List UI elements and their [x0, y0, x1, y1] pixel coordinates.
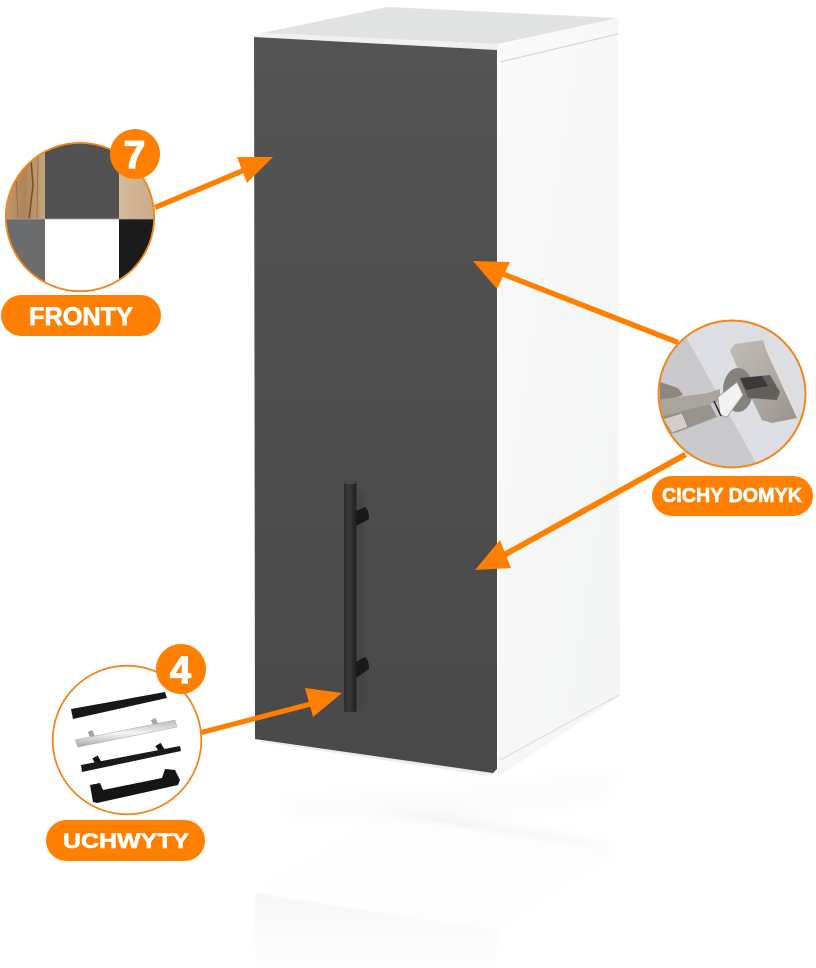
hinge photo circle — [650, 320, 806, 470]
uchwyty callout — [46, 644, 206, 861]
cabinet door — [254, 37, 497, 773]
cabinet top — [262, 7, 618, 44]
handle: silver bar — [75, 719, 177, 747]
door handle — [344, 481, 369, 712]
label: cichy domyk — [652, 476, 813, 516]
label: uchwyty — [46, 820, 205, 861]
badge: 4 — [156, 644, 206, 694]
floor shadow and reflection — [255, 770, 620, 968]
arrow: handles — [201, 688, 342, 735]
label: cichy domyk: CICHY DOMYK — [662, 485, 803, 507]
label: uchwyty: UCHWYTY — [63, 830, 189, 853]
cichy domyk callout — [650, 320, 813, 516]
cabinet side — [498, 18, 620, 777]
badge: 4: 4 — [170, 650, 191, 692]
colour swatch circle — [4, 140, 157, 295]
arrow: hinge to upper door — [473, 261, 679, 345]
label: fronty — [1, 295, 161, 336]
cabinet — [254, 7, 620, 777]
handle: black profile — [71, 692, 167, 719]
cabinet top front edge — [254, 33, 498, 50]
handles circle — [53, 644, 206, 814]
label: fronty: FRONTY — [29, 303, 133, 331]
arrow: fronty to door — [154, 157, 273, 210]
handle: black bow — [90, 769, 180, 803]
cabinet bottom edge — [255, 739, 497, 776]
arrow: hinge to lower door — [475, 452, 687, 570]
handle: black bar — [81, 744, 181, 772]
fronty callout — [1, 129, 161, 336]
badge: 7: 7 — [124, 134, 145, 177]
cabinet side seams — [500, 34, 619, 760]
badge: 7 — [110, 129, 160, 179]
